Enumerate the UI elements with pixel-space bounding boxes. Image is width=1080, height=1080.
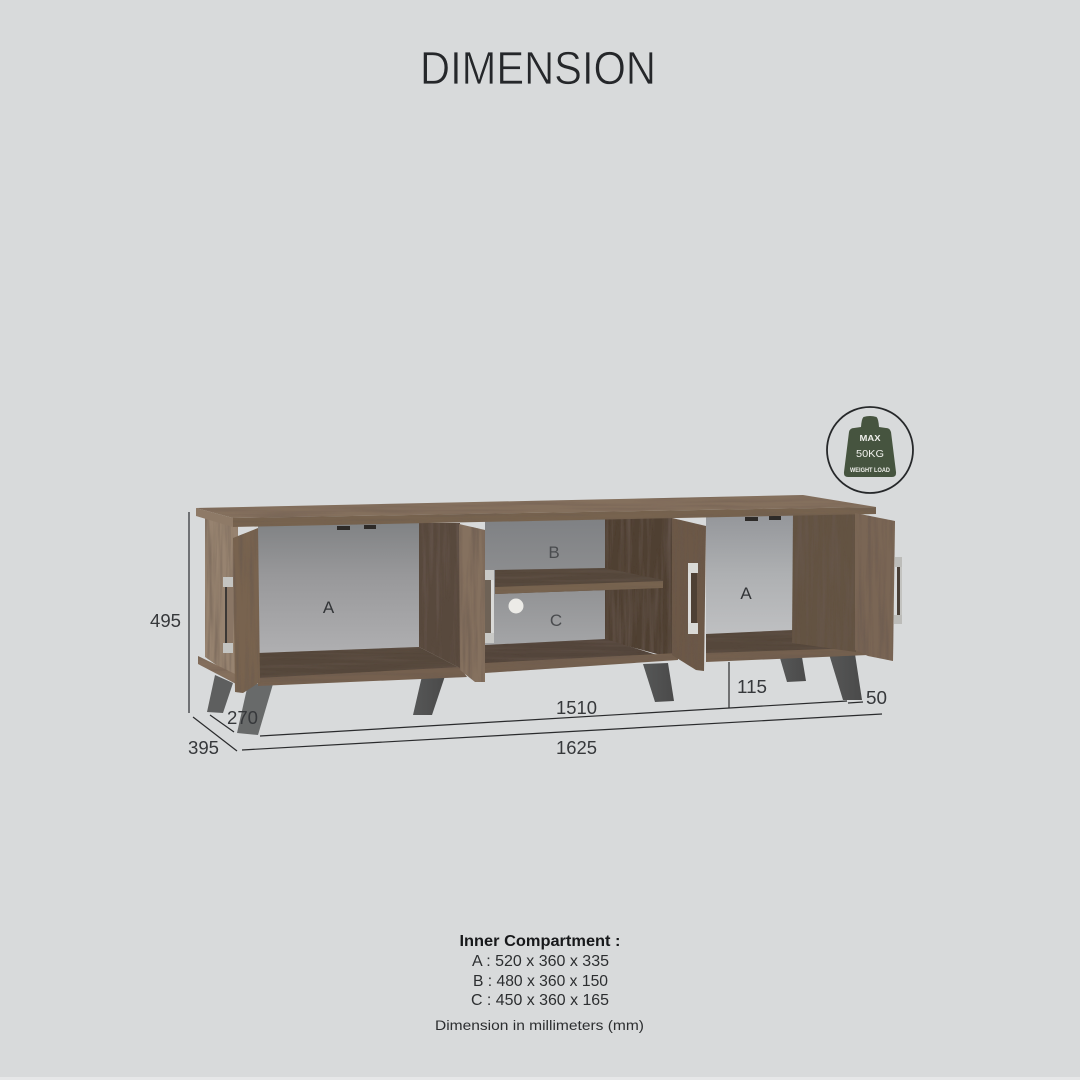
dimension labels: 270 bbox=[227, 708, 258, 728]
dimension labels: 115 bbox=[737, 677, 767, 697]
dimension labels bbox=[150, 611, 887, 758]
door 3 bbox=[672, 518, 706, 671]
door 2 bbox=[459, 524, 485, 682]
icon: max weight load badge: WEIGHT LOAD bbox=[850, 468, 891, 474]
compartment labels bbox=[323, 543, 752, 630]
compartment A left bbox=[258, 522, 467, 686]
door 4 handle bbox=[894, 557, 902, 624]
icon: max weight load badge bbox=[827, 407, 913, 493]
icon: max weight load badge: 50KG bbox=[856, 448, 884, 460]
dimension labels: 1510 bbox=[556, 698, 597, 718]
door 1 bbox=[233, 528, 260, 693]
door 2 handle bbox=[485, 570, 494, 643]
legs bbox=[207, 654, 862, 735]
top slab bbox=[196, 495, 876, 527]
inner compartment text block: B : 480 x 360 x 150 bbox=[473, 973, 608, 990]
compartment A right bbox=[706, 512, 868, 662]
inner compartment text block bbox=[435, 933, 644, 1033]
compartment centre bbox=[485, 517, 678, 673]
dimension labels: 395 bbox=[188, 738, 219, 758]
inner compartment text block: Dimension in millimeters (mm) bbox=[435, 1018, 644, 1033]
dimension labels: 495 bbox=[150, 611, 181, 631]
inner compartment text block: Inner Compartment : bbox=[460, 933, 620, 950]
dimension lines bbox=[189, 512, 882, 751]
furniture: TV cabinet bbox=[196, 495, 902, 735]
dimension labels: 50 bbox=[866, 688, 887, 708]
left side panel bbox=[205, 516, 238, 680]
door 4 bbox=[855, 513, 895, 661]
inner compartment text block: A : 520 x 360 x 335 bbox=[472, 953, 609, 970]
dimension labels: 1625 bbox=[556, 738, 597, 758]
left outer handle bbox=[223, 577, 233, 653]
compartment labels: A bbox=[740, 584, 752, 603]
door 3 handle bbox=[688, 563, 698, 634]
icon: max weight load badge: MAX bbox=[860, 434, 881, 443]
title: DIMENSION bbox=[420, 42, 656, 94]
compartment labels: C bbox=[550, 611, 562, 630]
inner compartment text block: C : 450 x 360 x 165 bbox=[471, 992, 609, 1009]
compartment labels: B bbox=[548, 543, 560, 562]
compartment labels: A bbox=[323, 598, 335, 617]
bottom left board bbox=[198, 656, 240, 686]
